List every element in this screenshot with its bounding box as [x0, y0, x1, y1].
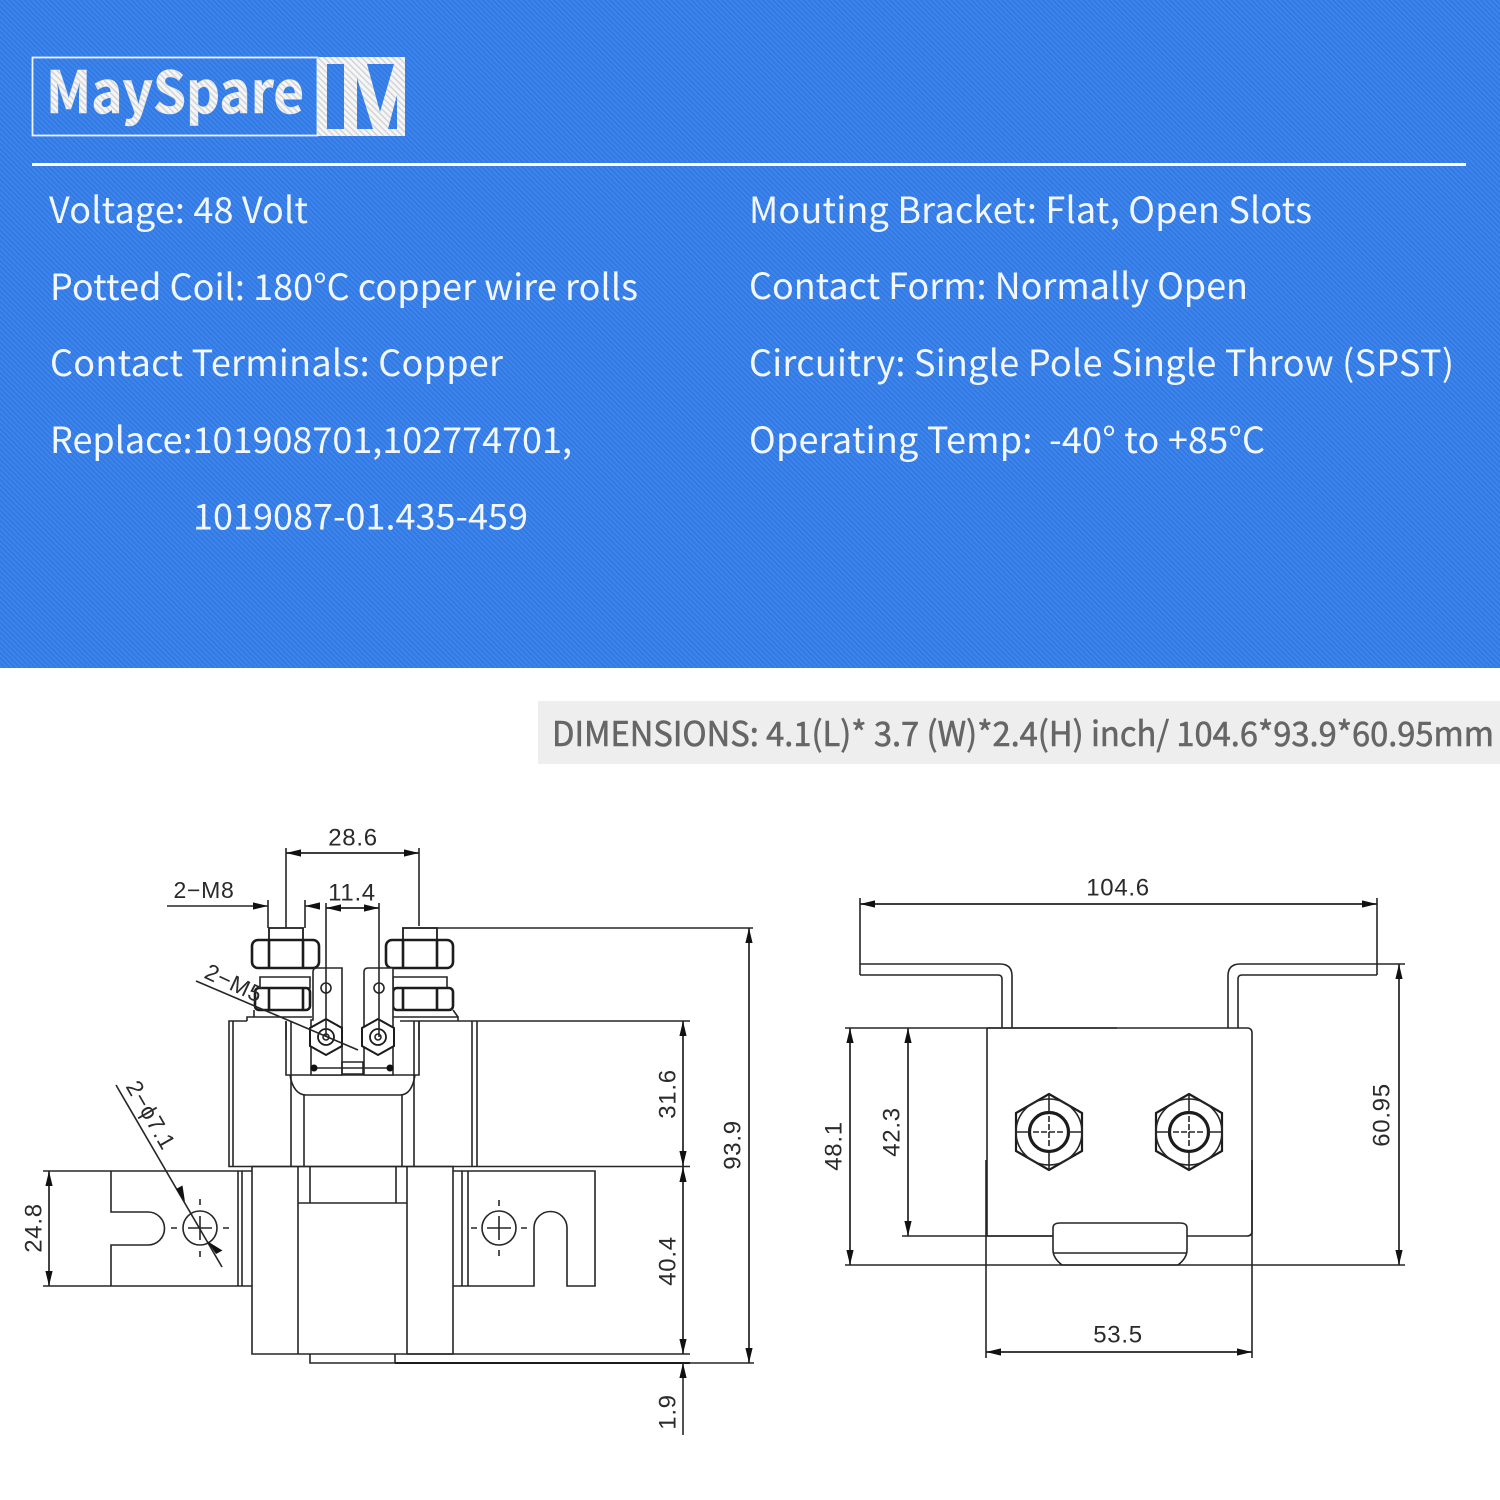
auxiliary terminals: [310, 968, 394, 1075]
dimension 11.4: 11.4: [328, 880, 376, 906]
dimension 53.5: 53.5: [1093, 1322, 1143, 1348]
text block: left specifications: Contact Terminals: Copper: [50, 335, 504, 387]
text block: right specifications: Circuitry: Single Pole Single Throw (SPST): [749, 335, 1454, 387]
hex terminal left: [1016, 1094, 1082, 1170]
dimension 93.9: 93.9: [720, 1120, 746, 1170]
text block: left specifications: Voltage: 48 Volt: [49, 182, 308, 234]
dimension 1.9: [654, 1363, 687, 1435]
dimension 2-M8: 2−M8: [174, 877, 234, 903]
text block: right specifications: Contact Form: Normally Open: [749, 258, 1248, 310]
upper body: [229, 1021, 690, 1166]
panel: blue specification header: [0, 0, 1500, 668]
dimension 31.6: 31.6: [654, 1069, 682, 1119]
right mounting bracket: [453, 1171, 595, 1286]
dimension 24.8: 24.8: [20, 1203, 48, 1253]
dimension 40.4: 40.4: [654, 1236, 682, 1286]
dimension 2-M8: [167, 877, 320, 928]
dimension 1.9: 1.9: [654, 1394, 682, 1430]
dimension 93.9: [418, 928, 754, 1363]
text block: right specifications: Operating Temp: -40° to +85°C: [749, 412, 1265, 464]
text block: left specifications: [49, 182, 638, 540]
dimension 53.5: [986, 1160, 1252, 1358]
logo: MaySpare: MaySpare: [46, 46, 304, 130]
label 2-phi 7.1 leader: [116, 1076, 222, 1267]
hex terminal right: [1156, 1094, 1222, 1170]
text block: left specifications: 1019087-01.435-459: [193, 488, 528, 540]
label 2-M5 leader: [196, 958, 358, 1050]
text block: left specifications: Replace:101908701,102774701,: [50, 412, 572, 464]
terminal nuts left: [247, 928, 319, 1021]
dimension 48.1: 48.1: [820, 1121, 848, 1171]
label 2-M5 leader: 2−M5: [201, 958, 267, 1008]
dimension 28.6: [286, 824, 419, 1040]
dimension 24.8: [20, 1171, 49, 1286]
terminal nuts right: [386, 928, 458, 1021]
dimension 28.6: 28.6: [328, 824, 378, 852]
dimension 11.4: [326, 880, 379, 1037]
dimension 104.6: [860, 874, 1377, 964]
dimension 42.3: 42.3: [878, 1107, 906, 1157]
divider line: [32, 163, 1466, 166]
chart: side view technical drawing: [20, 824, 754, 1435]
text block: left specifications: Potted Coil: 180°C copper wire rolls: [50, 259, 638, 311]
label 2-phi 7.1 leader: 2−ϕ7.1: [121, 1076, 181, 1154]
lower body: [252, 1166, 690, 1363]
dimension 104.6: 104.6: [1086, 874, 1150, 902]
mounting brackets: [860, 964, 1377, 1028]
dimension 60.95: 60.95: [1368, 1083, 1396, 1147]
text block: right specifications: Mouting Bracket: Flat, Open Slots: [749, 182, 1312, 234]
contactor body: [987, 1028, 1252, 1265]
text block: right specifications: [749, 182, 1454, 464]
dimension 48.1: [820, 1028, 1405, 1265]
chart: top view technical drawing: [820, 874, 1405, 1358]
left mounting bracket: [43, 1171, 252, 1286]
